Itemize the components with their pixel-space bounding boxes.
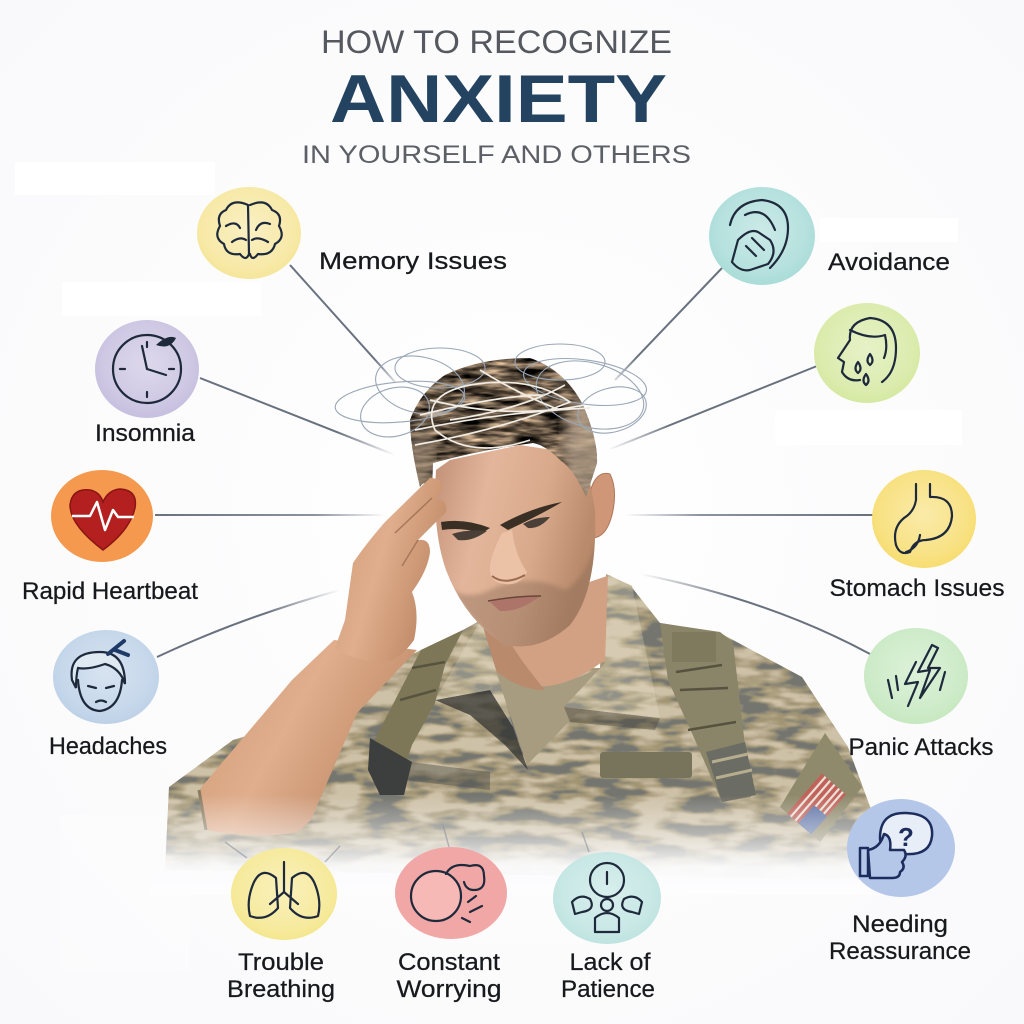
text: Patience	[561, 976, 655, 1003]
icon: memory issues brain	[197, 187, 301, 279]
icon: needing reassurance	[847, 799, 955, 897]
label: trouble breathing: Trouble	[238, 949, 324, 976]
nose	[490, 530, 527, 584]
label: needing reassurance: Needing	[852, 911, 948, 938]
stress scribbles	[334, 344, 652, 444]
t-shirt	[495, 665, 603, 765]
icon: sweating face	[814, 303, 920, 403]
icon: rapid heartbeat	[51, 470, 153, 562]
label: rapid heartbeat: Rapid Heartbeat	[22, 578, 198, 605]
label: lack of patience: Lack of	[570, 949, 651, 976]
icon: avoidance	[709, 187, 815, 285]
icon: constant worrying	[395, 847, 507, 939]
forearm	[199, 640, 417, 836]
backpack strap left	[371, 630, 463, 787]
title: ANXIETY	[330, 61, 667, 137]
text: Breathing	[227, 976, 335, 1003]
sleeve patch with flag	[780, 733, 862, 842]
connector lines	[155, 265, 873, 657]
backpack strap right	[660, 623, 751, 802]
ear	[590, 473, 615, 538]
label: avoidance: Avoidance	[828, 249, 950, 276]
soldier figure	[166, 344, 870, 866]
eyes	[452, 530, 487, 540]
label: panic attacks: Panic Attacks	[848, 734, 994, 761]
title: HOW TO RECOGNIZE	[321, 24, 672, 60]
eyebrows	[441, 521, 490, 533]
label: stomach issues: Stomach Issues	[830, 575, 1004, 602]
text: Reassurance	[829, 938, 971, 965]
collars	[436, 575, 660, 727]
chest velcro patch	[600, 752, 692, 778]
label: constant worrying: Constant	[398, 949, 500, 976]
label: memory issues: Memory Issues	[319, 248, 507, 275]
face	[435, 445, 595, 646]
icon: insomnia clock	[95, 320, 199, 418]
label: insomnia: Insomnia	[95, 420, 196, 447]
hair	[410, 358, 598, 497]
stubble	[456, 546, 594, 646]
icon: needing reassurance: ?	[898, 822, 914, 852]
title: IN YOURSELF AND OTHERS	[302, 141, 691, 169]
bottom connector stubs	[225, 825, 589, 862]
icon: stomach issues	[872, 470, 976, 568]
icon: panic attacks	[864, 628, 968, 724]
icon: lack of patience	[553, 852, 661, 944]
icon: headaches	[53, 630, 159, 724]
title	[302, 24, 691, 169]
text: Worrying	[396, 976, 502, 1003]
icon: trouble breathing lungs	[231, 848, 337, 940]
label: headaches: Headaches	[49, 733, 167, 760]
bottom fade	[150, 795, 910, 895]
neck	[478, 575, 625, 686]
mouth	[490, 596, 540, 611]
hand	[335, 478, 446, 662]
uniform	[166, 574, 870, 866]
